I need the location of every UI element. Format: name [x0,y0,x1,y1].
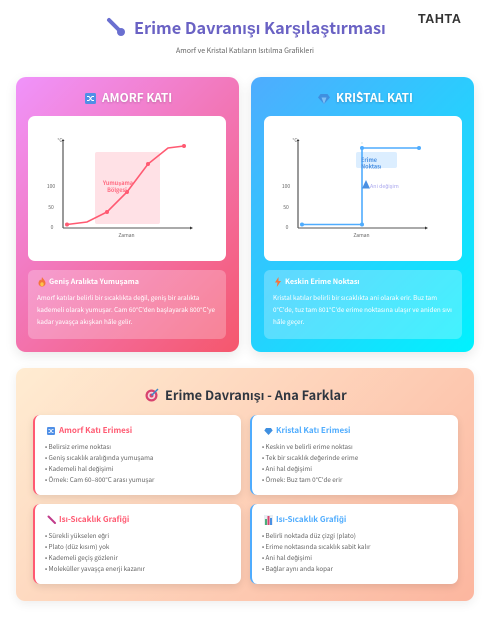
card: crystalline melting [250,415,458,495]
card: crystalline melting: Kristal Katı Erimesi [276,425,350,436]
chart: crystalline heating curve: Ani değişim [370,182,399,190]
card: crystalline graph: • Erime noktasında sıcaklık sabit kalır [262,542,370,551]
card: amorphous graph [33,504,241,584]
chart: crystalline heating curve [264,116,462,261]
info box: sharp melting point: hâle geçer. [273,317,304,326]
card: crystalline melting: • Ani hal değişimi [262,464,312,473]
card: crystalline graph: • Belirli noktada düz çizgi (plato) [262,531,356,540]
title: Erime Davranışı Karşılaştırması [134,15,386,39]
card: amorphous graph: • Kademeli geçiş gözlenir [45,553,118,562]
card: amorphous melting: Amorf Katı Erimesi [59,425,132,436]
chart: amorphous heating curve: 50 [48,204,54,211]
panel: amorphous solid [16,77,239,352]
card: amorphous graph: Isı-Sıcaklık Grafiği [59,514,129,525]
info box: broad softening: Amorf katılar belirli bir sıcaklıkta değil, geniş bir aralıkta [37,293,199,302]
info box: sharp melting point: Keskin Erime Noktası [285,277,359,287]
info box: sharp melting point: 0°C'de, tuz tam 801°C'de erime noktasına ulaşır ve aniden sıvı [273,305,452,314]
chart: amorphous heating curve: Zaman [118,232,135,239]
card: crystalline graph: Isı-Sıcaklık Grafiği [276,514,346,525]
icon: bar chart [264,515,273,525]
card: amorphous melting: • Kademeli hal değişimi [45,464,113,473]
card: crystalline melting: • Keskin ve belirli erime noktası [262,442,353,451]
card: crystalline graph [250,504,458,584]
subtitle: Amorf ve Kristal Katıların Isıtılma Grafikleri [176,46,314,56]
info box: broad softening [28,270,226,339]
icon: lightning [275,277,281,287]
icon: target [146,388,158,402]
panel: key differences [16,368,474,601]
icon: shuffle [47,427,55,435]
chart: amorphous heating curve: 0 [51,224,54,231]
icon: diamond [318,94,330,104]
chart: amorphous heating curve [28,116,226,261]
info box: broad softening: kadar yavaşça akışkan hâle gelir. [37,317,132,326]
chart: crystalline heating curve: °C [292,137,298,144]
chart: crystalline heating curve: 0 [286,224,289,231]
panel: crystalline solid [251,77,474,352]
info box: broad softening: Geniş Aralıkta Yumuşama [49,277,139,287]
icon: fire [38,277,46,287]
card: crystalline graph: • Ani hal değişimi [262,553,312,562]
info box: broad softening: kademeli olarak yumuşar. Cam 60°C'den başlayarak 800°C'ye [37,305,215,314]
info box: sharp melting point: Kristal katılar belirli bir sıcaklıkta ani olarak erir. Buz tam [273,293,437,302]
card: amorphous graph: • Moleküller yavaşça enerji kazanır [45,564,145,572]
card: crystalline melting: • Örnek: Buz tam 0°C'de erir [262,474,342,484]
header: thermometer icon [106,18,125,36]
icon: diamond [264,428,273,435]
card: crystalline melting: • Tek bir sıcaklık değerinde erime [262,453,358,462]
chart: amorphous heating curve: 100 [47,183,55,190]
chart: crystalline heating curve: 100 [282,183,290,190]
chart: crystalline heating curve: Erime [361,156,377,164]
card: amorphous melting: • Örnek: Cam 60–800°C arası yumuşar [45,474,154,484]
card: amorphous melting: • Geniş sıcaklık aralığında yumuşama [45,453,153,462]
chart: amorphous heating curve: Yumuşama [102,179,133,187]
chart: crystalline heating curve: 50 [283,204,289,211]
card: amorphous graph: • Plato (düz kısım) yok [45,542,109,551]
icon: shuffle [85,93,96,104]
icon: thermometer [48,516,56,524]
section heading: Erime Davranışı - Ana Farklar [165,385,347,404]
panel heading: kristal: KRİSTAL KATI [336,89,413,106]
chart: crystalline heating curve: Zaman [353,232,370,239]
card: amorphous melting: • Belirsiz erime noktası [45,442,111,451]
panel heading: amorf: AMORF KATI [102,89,172,106]
logo: TAHTA [418,12,462,26]
chart: amorphous heating curve: Bölgesi [107,186,127,194]
chart: crystalline heating curve: Noktası [361,162,382,170]
info box: sharp melting point [264,270,462,339]
card: crystalline graph: • Bağlar aynı anda kopar [262,564,333,572]
chart: amorphous heating curve: °C [57,137,63,144]
card: amorphous melting [33,415,241,495]
card: amorphous graph: • Sürekli yükselen eğri [45,531,109,540]
